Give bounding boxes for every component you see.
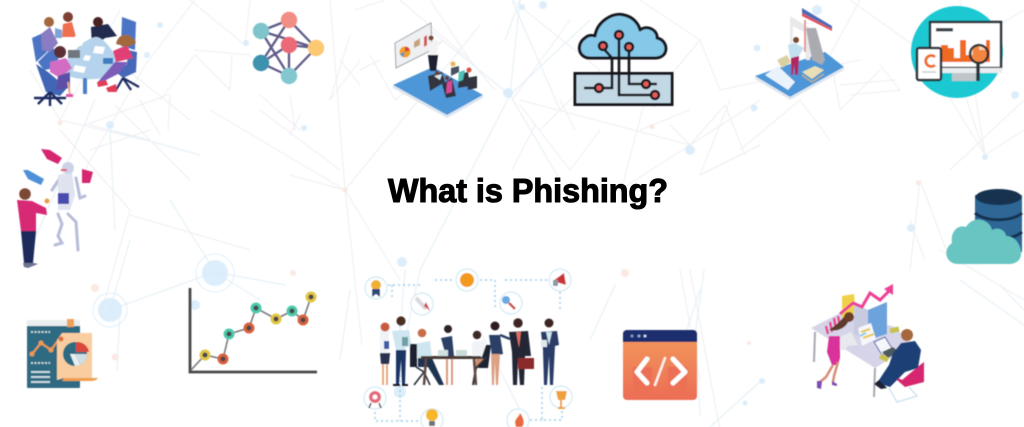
seated people behind the table [41,27,58,52]
growth bars [842,294,856,320]
audience [428,72,477,98]
woman standing center [444,325,452,333]
icon: isometric presentation [393,23,483,118]
line chart [190,288,317,372]
standing man [396,316,406,326]
icon: report with pie chart [27,319,98,388]
far chairs [121,17,136,50]
pink chair [889,362,924,387]
icon: person talking to robot [17,149,93,268]
suit man with briefcase [513,318,523,328]
laptop [874,337,893,355]
chair frame [889,387,917,402]
icon ring badges [364,269,572,427]
icon: cloud circuit [575,14,672,104]
icon: team meeting around a table [32,12,139,106]
dotted connectors [375,280,562,421]
front woman and chair [36,64,67,96]
illustration: business team with icons [364,269,572,427]
suit man right [544,318,554,328]
seated man [418,329,426,337]
woman left [380,324,390,355]
icon: database and cloud [946,189,1022,264]
people at table [380,316,559,386]
title: What is Phishing? [388,172,668,209]
table [421,356,481,359]
badge icons [369,273,567,427]
right woman and chair [116,50,137,78]
icon: code window [623,330,697,400]
icon: analytics dashboard in teal circle [911,6,1003,98]
table [62,37,119,79]
icon: isometric person with books [755,8,844,100]
man [877,341,921,387]
standing woman right [490,322,500,330]
desk [811,312,912,368]
table papers [73,36,105,73]
icon: isometric desk with growth chart [811,284,924,402]
icon: network nodes [253,12,324,84]
desk papers [858,323,876,346]
woman [835,332,858,350]
presenter [428,39,445,55]
seated woman [473,331,481,339]
